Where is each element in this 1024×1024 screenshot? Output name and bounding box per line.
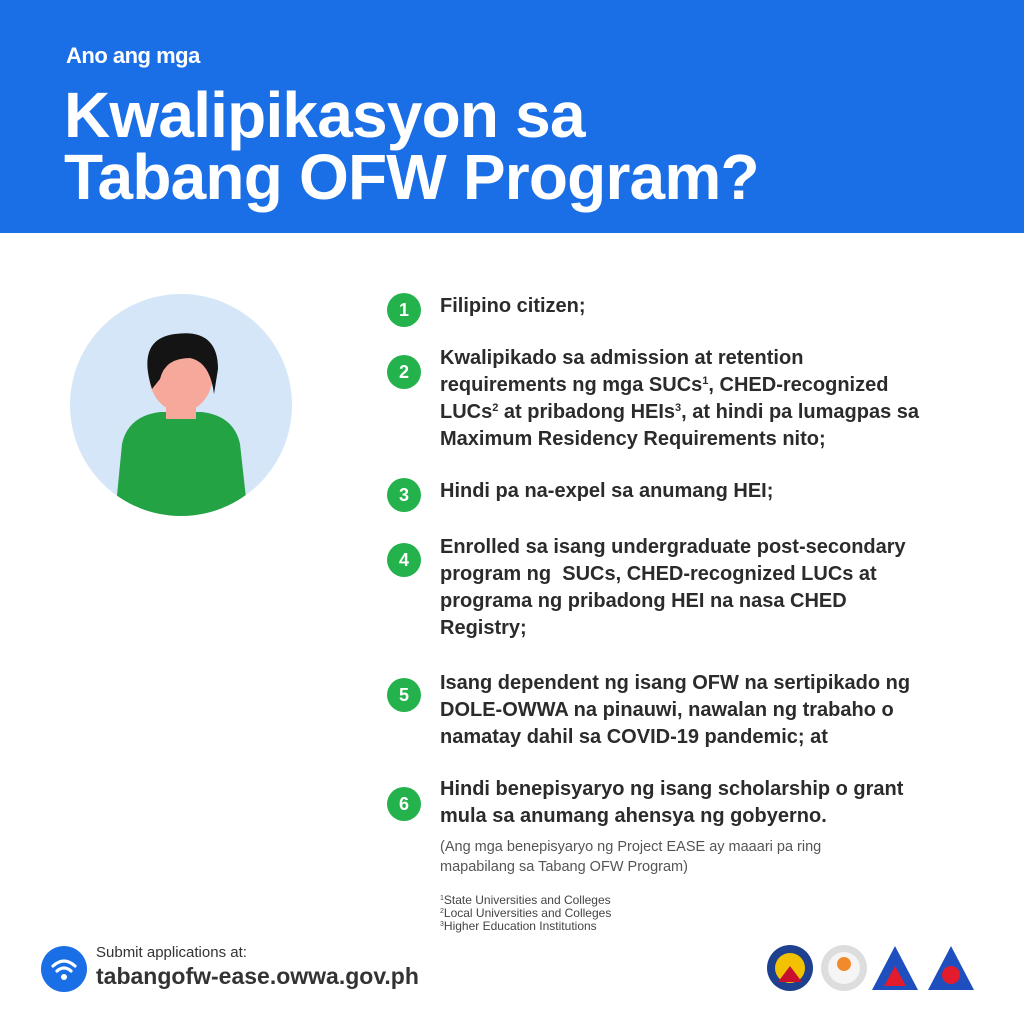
item 4: 4 [399, 550, 409, 570]
item 1 [387, 293, 586, 327]
footnotes: 2Local Universities and Colleges [440, 906, 611, 920]
footnotes [440, 893, 611, 933]
footnotes: 1State Universities and Colleges [440, 893, 611, 907]
item 2: Kwalipikado sa admission at retention [440, 347, 803, 369]
item 5: DOLE-OWWA na pinauwi, nawalan ng trabaho o [440, 699, 894, 721]
icon: wifi [41, 946, 87, 992]
item 5: Isang dependent ng isang OFW na sertipikado ng [440, 672, 910, 694]
title: Kwalipikasyon sa [64, 79, 585, 151]
item 4: program ng SUCs, CHED-recognized LUCs at [440, 563, 877, 585]
title [64, 79, 759, 213]
item 2: LUCs2 at pribadong HEIs3, at hindi pa lumagpas sa [440, 401, 919, 423]
item 6: 6 [399, 794, 409, 814]
item 3 [387, 478, 773, 512]
subtitle: Ano ang mga [66, 43, 200, 68]
item 5: namatay dahil sa COVID-19 pandemic; at [440, 726, 828, 748]
note: (Ang mga benepisyaryo ng Project EASE ay maaari pa ring [440, 839, 821, 855]
item 1: Filipino citizen; [440, 295, 586, 317]
item 4: Registry; [440, 617, 527, 639]
item 2: 2 [399, 362, 409, 382]
item 1: 1 [399, 300, 409, 320]
title: Tabang OFW Program? [64, 141, 759, 213]
item 5: 5 [399, 685, 409, 705]
item 2 [387, 347, 920, 450]
header [0, 0, 1024, 233]
submit text: tabangofw-ease.owwa.gov.ph [96, 963, 419, 989]
item 6: Hindi benepisyaryo ng isang scholarship o grant [440, 778, 903, 800]
item 6: mula sa anumang ahensya ng gobyerno. [440, 805, 827, 827]
item 4: Enrolled sa isang undergraduate post-secondary [440, 536, 906, 558]
item 6 [387, 778, 904, 827]
logos [767, 945, 974, 991]
footnotes: 3Higher Education Institutions [440, 919, 597, 933]
icon: person avatar [70, 294, 292, 516]
item 3: Hindi pa na-expel sa anumang HEI; [440, 480, 773, 502]
item 4: programa ng pribadong HEI na nasa CHED [440, 590, 847, 612]
submit text [96, 944, 419, 989]
item 4 [387, 536, 906, 639]
item 5 [387, 672, 910, 748]
note [440, 839, 821, 875]
item 3: 3 [399, 485, 409, 505]
submit text: Submit applications at: [96, 944, 247, 961]
item 2: requirements ng mga SUCs1, CHED-recognized [440, 374, 888, 396]
note: mapabilang sa Tabang OFW Program) [440, 859, 688, 875]
item 2: Maximum Residency Requirements nito; [440, 428, 826, 450]
